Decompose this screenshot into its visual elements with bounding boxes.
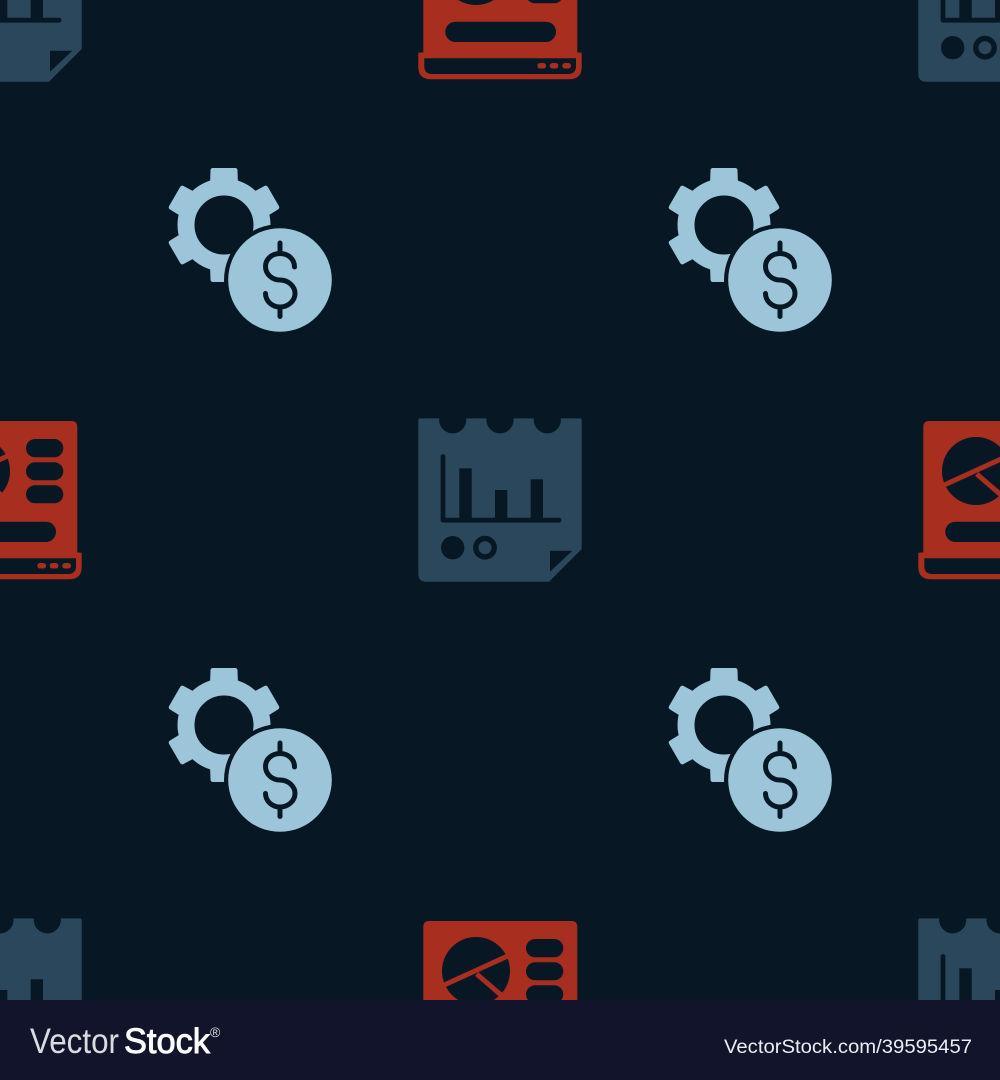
icon: gear and dollar coin upper right: [668, 168, 836, 336]
icon: paper chart bottom left: [0, 906, 82, 1080]
footer bar: [0, 1000, 1000, 1080]
icon: paper chart top right: [918, 0, 1000, 82]
icon: paper chart top left: [0, 0, 82, 82]
icon: paper chart bottom right: [918, 906, 1000, 1080]
icon: report book top centre: [418, 0, 582, 79]
footer logo: VectorStock: [30, 1022, 221, 1061]
icon: paper chart centre: [418, 406, 582, 582]
footer logo: VectorStock: Stock: [124, 1022, 210, 1061]
icon: gear and dollar coin lower right: [668, 668, 836, 836]
icon: report book bottom centre: [418, 921, 582, 1079]
footer logo: VectorStock: Vector: [30, 1022, 119, 1061]
icon: gear and dollar coin lower left: [168, 668, 336, 836]
footer image id: VectorStock.com/39595457: [724, 1037, 972, 1058]
icon: gear and dollar coin upper left: [168, 168, 336, 336]
footer logo: VectorStock: ®: [210, 1024, 221, 1040]
icon: report book middle right: [918, 421, 1000, 579]
icon: report book middle left: [0, 421, 82, 579]
